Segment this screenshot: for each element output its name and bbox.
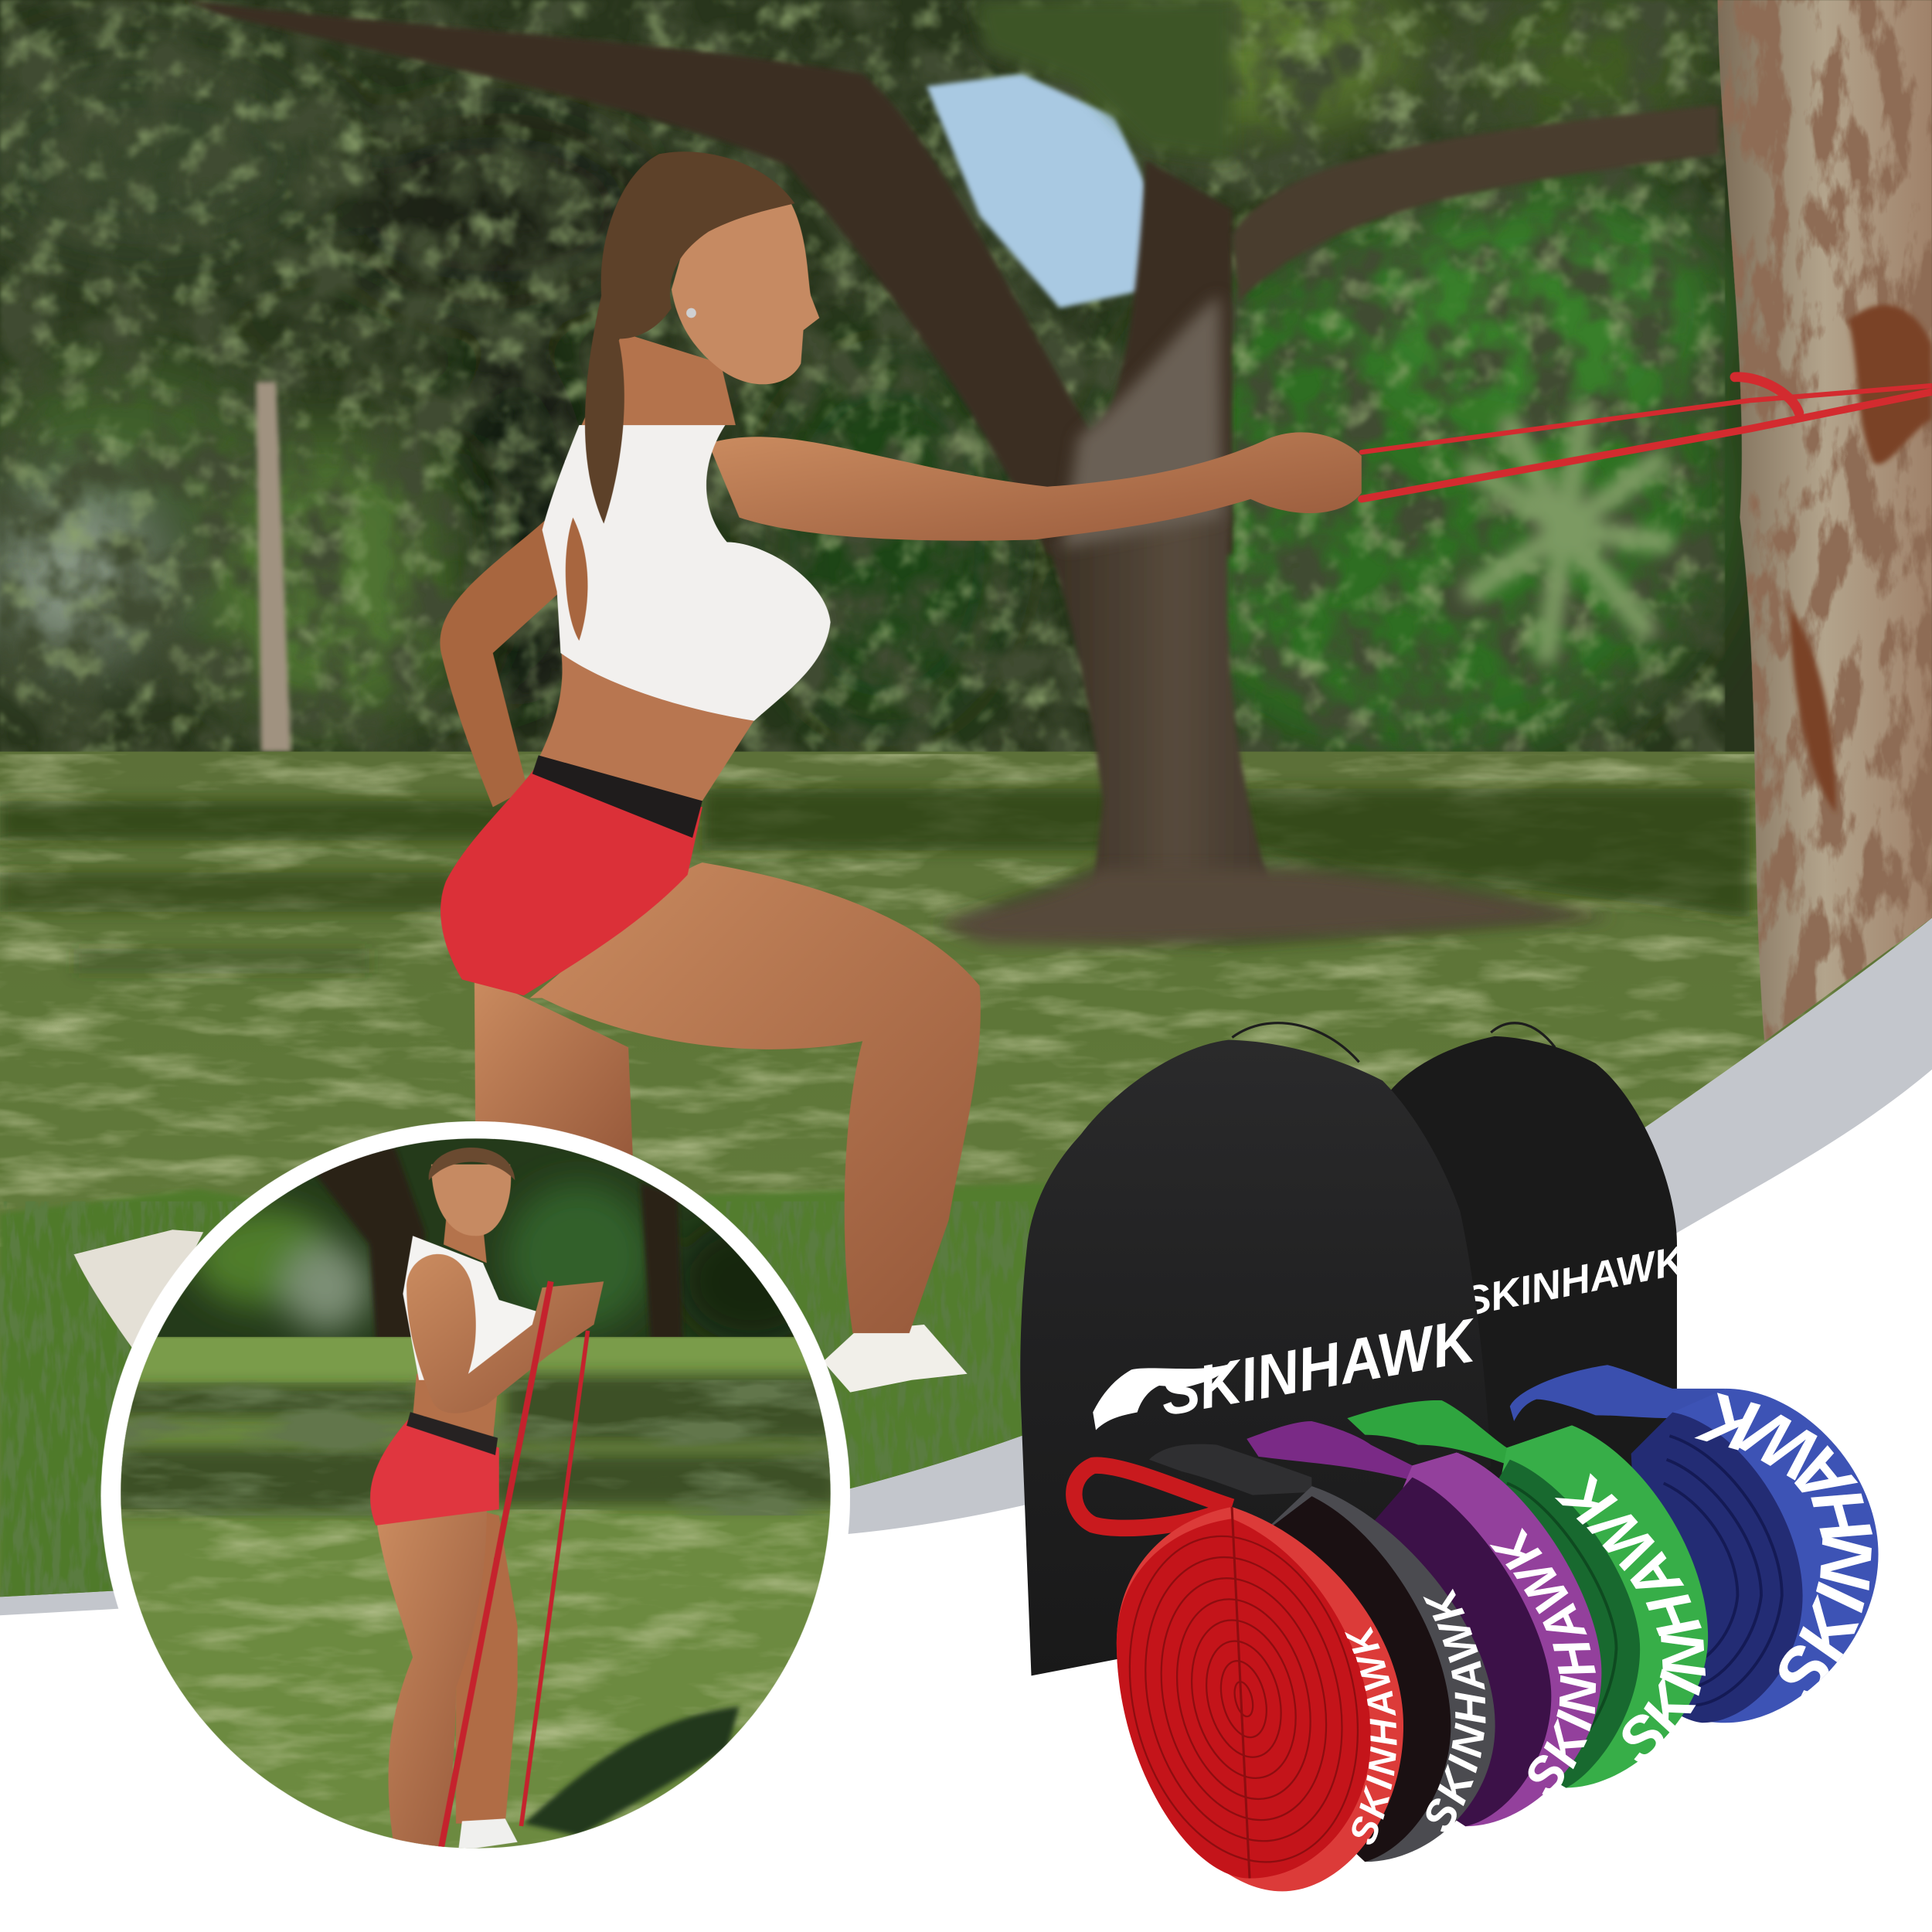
green rim xyxy=(1489,1425,1708,1787)
inset shoe xyxy=(458,1818,518,1851)
near foot shoe xyxy=(823,1325,968,1393)
green resistance band: SKINHAWK xyxy=(1555,1473,1706,1762)
black loop xyxy=(1149,1444,1311,1495)
red loop xyxy=(1074,1465,1232,1528)
blue band logo: SKINHAWK xyxy=(1694,1393,1873,1696)
back drawstring bag xyxy=(1389,1023,1691,1528)
inset upper lawn strip xyxy=(111,1338,850,1383)
inset woman xyxy=(370,1148,604,1851)
hair and ponytail xyxy=(585,151,794,524)
background pole xyxy=(257,382,291,752)
tree canopy backdrop xyxy=(0,0,1932,788)
grey swoosh band xyxy=(0,918,1932,1615)
back arm xyxy=(440,518,560,807)
tree trunk xyxy=(1047,493,1281,912)
purple rim xyxy=(1383,1453,1601,1826)
inset neck xyxy=(444,1219,487,1263)
leaves over sky xyxy=(974,0,1232,160)
green coil face xyxy=(1471,1460,1640,1787)
blue resistance band xyxy=(1510,1365,1888,1767)
white crop top xyxy=(543,419,831,721)
black coil face xyxy=(1259,1496,1451,1862)
inset foliage xyxy=(191,1183,825,1343)
inset head xyxy=(431,1165,511,1236)
purple band logo xyxy=(1480,1483,1596,1800)
black waistband xyxy=(532,755,702,838)
central tree xyxy=(185,0,1614,944)
sky patch xyxy=(927,74,1148,308)
front bag logo text: SKINHAWK xyxy=(1155,1305,1484,1429)
blue rim xyxy=(1643,1389,1879,1723)
inset waistband xyxy=(406,1412,498,1455)
inset arm xyxy=(406,1254,604,1413)
front bag cord xyxy=(1232,1023,1359,1062)
front bag body xyxy=(1020,1040,1491,1675)
purple coil face xyxy=(1371,1478,1551,1826)
bark peeling texture xyxy=(1718,0,1932,1041)
purple resistance band xyxy=(1247,1421,1608,1826)
green loop xyxy=(1347,1400,1572,1464)
red band logo xyxy=(1362,1611,1396,1847)
far foot shoe xyxy=(74,1230,203,1349)
trunk highlight xyxy=(1062,296,1223,549)
foreground long grass xyxy=(0,1183,1047,1614)
panel: inset photo xyxy=(111,1134,850,1866)
inset circle frame xyxy=(101,1121,850,1870)
green resistance band xyxy=(1347,1400,1719,1787)
red shorts xyxy=(440,767,702,995)
neck xyxy=(582,332,736,425)
palm tree fronds xyxy=(1472,413,1663,653)
black rim xyxy=(1259,1486,1495,1862)
purple resistance band: SKINHAWK xyxy=(1490,1528,1597,1794)
front drawstring bag xyxy=(1020,1023,1491,1675)
foreground grass blades xyxy=(0,1202,1047,1608)
panel: coiled bands xyxy=(1074,1365,1888,1891)
standing leg xyxy=(474,974,634,1171)
inset band strands xyxy=(441,1281,588,1849)
lawn xyxy=(0,752,1932,1614)
earring xyxy=(686,308,696,318)
back bag body xyxy=(1389,1036,1677,1528)
trunk root flare xyxy=(937,869,1614,944)
rear leg xyxy=(456,1509,518,1824)
inset cast shadow xyxy=(524,1706,740,1836)
inset shadow mottling xyxy=(111,1380,850,1515)
canopy dark leaf texture xyxy=(0,0,1725,758)
front leg xyxy=(376,1509,487,1849)
tree limb xyxy=(185,0,1232,554)
black resistance band: SKINHAWK xyxy=(1423,1589,1485,1832)
back bag logo: SKINHAWK xyxy=(1459,1237,1691,1325)
red rim xyxy=(1117,1507,1403,1891)
lawn light texture xyxy=(0,754,1932,1247)
red resistance band xyxy=(1074,1465,1406,1891)
resistance band on tree xyxy=(1362,377,1932,499)
raised thigh and calf xyxy=(530,862,981,1333)
black resistance band xyxy=(1149,1444,1495,1862)
blue coil face xyxy=(1631,1412,1803,1723)
blue loop xyxy=(1510,1365,1726,1421)
front bag hawk logo xyxy=(1093,1363,1232,1430)
inset shorts xyxy=(370,1417,499,1526)
lawn shadows xyxy=(0,788,1750,974)
face xyxy=(672,203,819,384)
canopy light leaf texture xyxy=(0,0,1725,758)
back keyhole xyxy=(566,518,587,641)
bark red patches xyxy=(1789,304,1932,813)
woman exercising xyxy=(440,151,1362,1333)
inset grass mottling xyxy=(111,1509,850,1866)
reaching arm xyxy=(709,432,1362,541)
inset background trees xyxy=(111,1134,850,1355)
bark tree trunk xyxy=(1718,0,1932,1041)
inset lawn shadows xyxy=(111,1374,838,1513)
inset hair xyxy=(429,1148,515,1180)
back bag cord xyxy=(1491,1023,1555,1047)
purple loop xyxy=(1247,1421,1460,1480)
red coil face xyxy=(1097,1507,1390,1886)
inset tree trunks xyxy=(308,1146,684,1393)
red resistance band: SKINHAWK xyxy=(1345,1626,1397,1845)
inset lawn xyxy=(111,1337,850,1866)
midriff xyxy=(536,647,758,801)
inset white top xyxy=(403,1236,539,1380)
inset midriff xyxy=(413,1374,499,1441)
green band logo xyxy=(1536,1427,1705,1767)
black band logo xyxy=(1430,1551,1485,1835)
upper branches xyxy=(1232,105,1719,302)
